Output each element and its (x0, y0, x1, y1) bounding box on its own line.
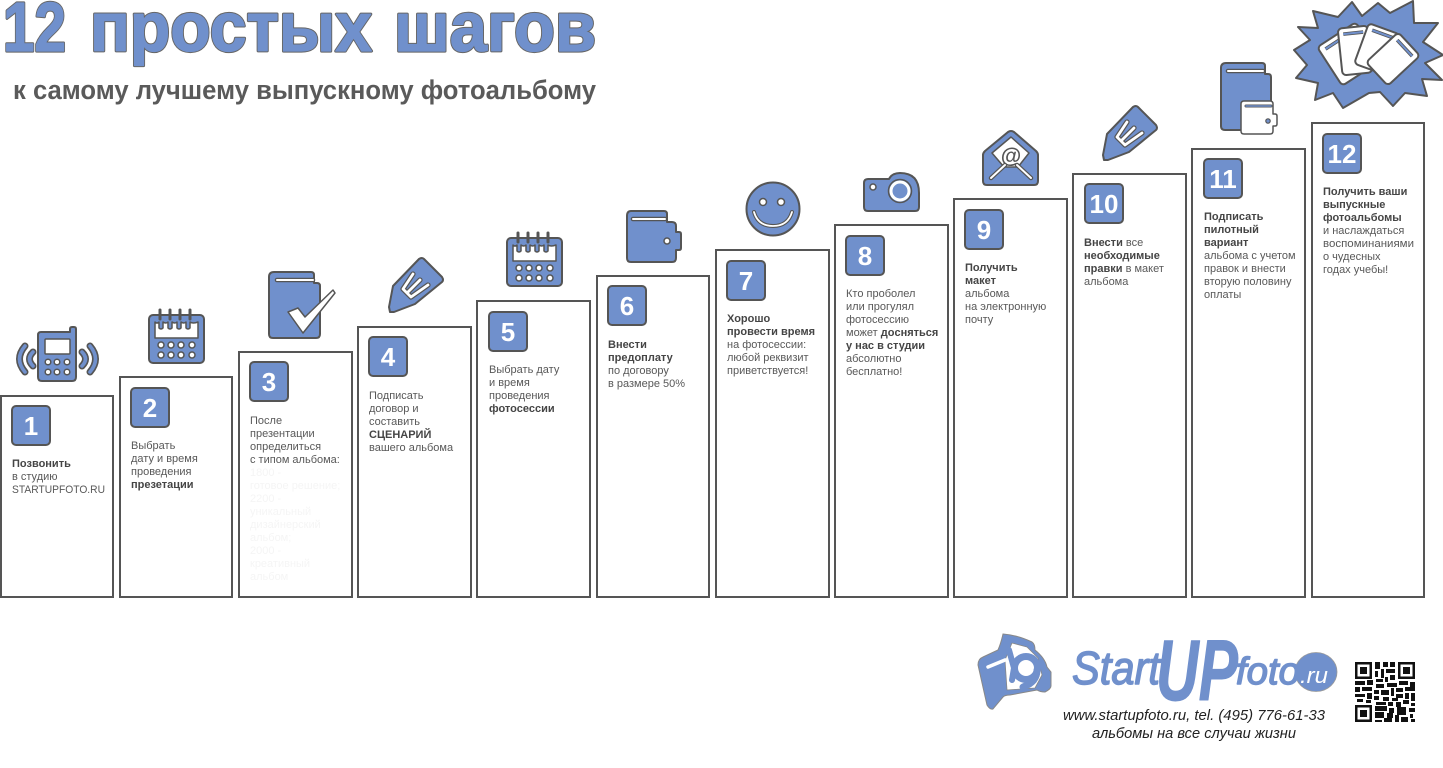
step 9 panel: на электронную (965, 301, 1046, 313)
step 6 panel: предоплату (608, 352, 674, 364)
step 1 panel: STARTUPFOTO.RU (12, 484, 105, 496)
step 8 panel: абсолютно (846, 353, 901, 365)
step 3 panel: презентации (250, 428, 315, 440)
step 11 panel: вторую половину (1204, 276, 1292, 288)
icon: starburst with albums (1294, 1, 1443, 108)
logo: camera mark (978, 634, 1051, 709)
step 2 panel: дату и время (131, 453, 198, 465)
step 3 panel: с типом альбома: (250, 454, 340, 466)
step 11 panel: вариант (1204, 237, 1249, 249)
icon: camera (864, 173, 919, 211)
step 12 panel: воспоминаниями (1323, 238, 1414, 250)
logo: wordmark: foto (1236, 651, 1300, 693)
step 2 panel: презетации (131, 479, 194, 491)
step 3 panel: определиться (250, 441, 321, 453)
step 3 panel: После (250, 415, 282, 427)
step 1 panel: Позвонить (12, 458, 71, 470)
step 3 panel: 2000 - (250, 545, 282, 557)
step 8 panel: бесплатно! (846, 366, 902, 378)
step 3 panel: 1800 - (250, 467, 281, 479)
step 8 panel: или прогулял (846, 301, 914, 313)
step 6 panel: 6 (620, 291, 634, 321)
step 11 panel: правок и внести (1204, 263, 1286, 275)
logo: wordmark: UP (1156, 623, 1238, 719)
step 4 panel: Подписать (369, 390, 423, 402)
step 5 panel: и время (489, 377, 530, 389)
icon: calendar, step 2 (149, 310, 204, 363)
step 8 panel: у нас в студии (846, 340, 925, 352)
step 9 panel (954, 199, 1067, 597)
step 6 panel (597, 276, 709, 597)
step 2 panel (120, 377, 232, 597)
step 12 panel: годах учебы! (1323, 264, 1388, 276)
step 8 panel: Кто проболел (846, 288, 915, 300)
step 5 panel: фотосессии (489, 403, 555, 415)
step 12 panel: 12 (1328, 139, 1356, 169)
step 7 panel: приветствуется! (727, 365, 808, 377)
step 10 panel: Внести все (1084, 237, 1143, 249)
step 2 panel: проведения (131, 466, 192, 478)
step 10 panel: правки в макет (1084, 263, 1164, 275)
step 8 panel: может доcняться (846, 327, 938, 339)
step 9 panel: альбома (965, 288, 1010, 300)
step 1 panel: в студию (12, 471, 58, 483)
step 3 panel: уникальный (250, 506, 311, 518)
step 7 panel: 7 (739, 266, 753, 296)
step 11 panel: альбома с учетом (1204, 250, 1296, 262)
step 9 panel: 9 (977, 215, 991, 245)
icon: paper tag, step 10 (1103, 106, 1157, 160)
step 4 panel: договор и (369, 403, 419, 415)
step 5 panel: 5 (501, 317, 515, 347)
step 9 panel: макет (965, 275, 997, 287)
step 2 panel: Выбрать (131, 440, 175, 452)
step 11 panel: Подписать (1204, 211, 1264, 223)
tagline: альбомы на все случаи жизни (1092, 726, 1296, 742)
step 12 panel: Получить ваши (1323, 186, 1407, 198)
step 12 panel (1312, 123, 1424, 597)
step 12 panel: и наслаждаться (1323, 225, 1404, 237)
step 3 panel: альбом (250, 571, 288, 583)
icon: paper tag, step 4 (389, 258, 443, 312)
QR code (1355, 662, 1415, 722)
step 4 panel (358, 327, 471, 597)
logo: wordmark: Start (1072, 642, 1162, 694)
step 9 panel: почту (965, 314, 994, 326)
step 3 panel: 2200 - (250, 493, 282, 505)
step 1 panel: 1 (24, 411, 38, 441)
subtitle: к самому лучшему выпускному фотоальбому (13, 75, 596, 105)
step 8 panel (835, 225, 948, 597)
step 7 panel: любой реквизит (727, 352, 809, 364)
step 11 panel: пилотный (1204, 224, 1259, 236)
step 3 panel: альбом; (250, 532, 291, 544)
step 1 panel (1, 396, 113, 597)
contact line: www.startupfoto.ru, tel. (495) 776-61-33 (1063, 708, 1325, 724)
step 5 panel (477, 301, 590, 597)
logo: wordmark: .ru (1300, 663, 1328, 688)
step 8 panel: фотосессию (846, 314, 909, 326)
icon: mobile phone (20, 327, 96, 381)
step 12 panel: фотоальбомы (1323, 212, 1402, 224)
icon: album with wallet (1221, 63, 1277, 134)
step 7 panel (716, 250, 829, 597)
step 6 panel: Внести (608, 339, 647, 351)
step 10 panel: альбома (1084, 276, 1129, 288)
step 4 panel: вашего альбома (369, 442, 454, 454)
step 5 panel: проведения (489, 390, 550, 402)
step 2 panel: 2 (143, 393, 157, 423)
icon: envelope with at sign (983, 131, 1038, 185)
step 11 panel (1192, 149, 1305, 597)
step 3 panel: готовое решение; (250, 480, 340, 492)
step 3 panel: креативный (250, 558, 310, 570)
step 3 panel (239, 352, 352, 597)
step 9 panel: Получить (965, 262, 1018, 274)
step 8 panel: 8 (858, 241, 872, 271)
step 5 panel: Выбрать дату (489, 364, 559, 376)
step 4 panel: СЦЕНАРИЙ (369, 428, 431, 441)
step 10 panel: необходимые (1084, 250, 1160, 262)
title (3, 0, 596, 66)
icon: album with check mark (269, 272, 335, 338)
step 6 panel: по договору (608, 365, 669, 377)
step 6 panel: в размере 50% (608, 378, 685, 390)
step 7 panel: на фотосессии: (727, 339, 806, 351)
icon: calendar, step 5 (507, 233, 562, 286)
step 3 panel: 3 (262, 367, 276, 397)
step 11 panel: оплаты (1204, 289, 1241, 301)
step 10 panel: 10 (1090, 189, 1118, 219)
logo: wordmark (1072, 623, 1337, 719)
step 12 panel: выпускные (1323, 199, 1385, 211)
step 12 panel: о чудесных (1323, 251, 1381, 263)
step 10 panel (1073, 174, 1186, 597)
icon: wallet, step 6 (627, 211, 681, 262)
step 4 panel: 4 (381, 342, 396, 372)
step 4 panel: составить (369, 416, 420, 428)
icon: smiley (746, 182, 800, 236)
step 7 panel: Хорошо (727, 313, 771, 325)
icon: envelope with at sign: @ (1001, 145, 1021, 168)
step 3 panel: дизайнерский (250, 519, 321, 531)
step 11 panel: 11 (1209, 164, 1237, 194)
step 7 panel: провести время (727, 326, 815, 338)
